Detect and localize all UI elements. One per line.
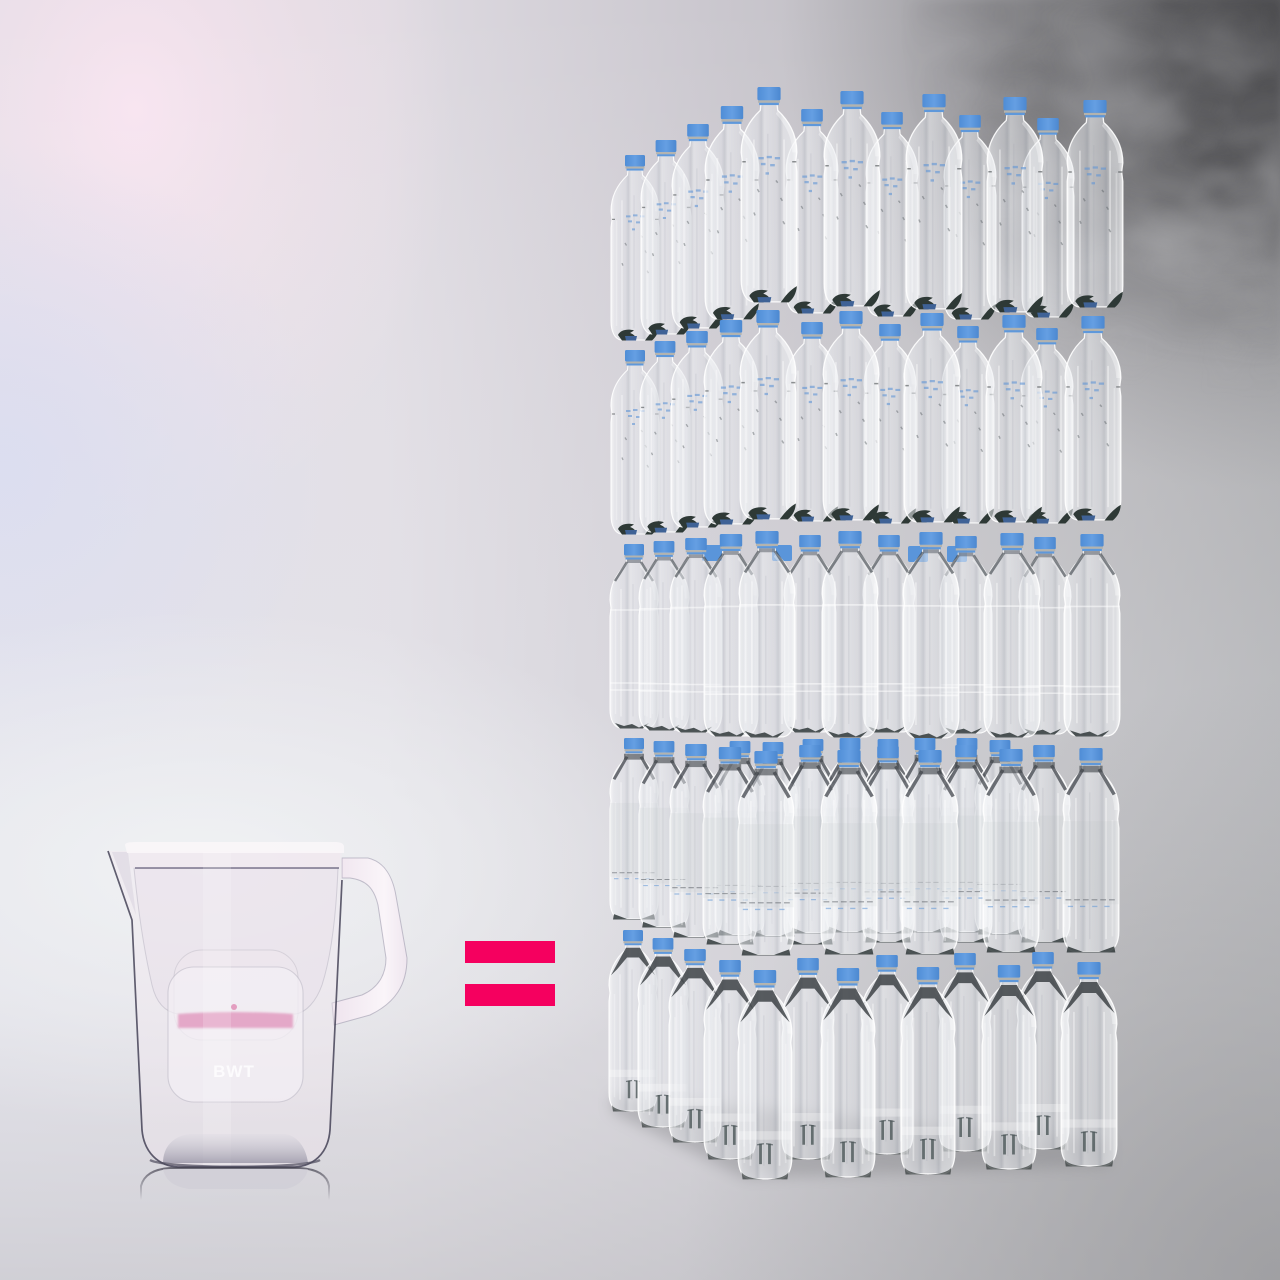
bottle row 1 (top) [611,87,1123,340]
inner water reservoir [134,868,338,1014]
spout inner line [112,852,136,915]
peeking caps behind row 3 [702,545,967,562]
light streak [203,852,231,1166]
bottle row 5 (bottom) [609,930,1117,1179]
bottle stack [609,87,1123,1179]
jug reflection [141,1168,329,1200]
bottle row 2 [611,310,1121,534]
jug lid [125,842,344,853]
reflected base [163,1169,308,1189]
jug handle [332,858,407,1025]
filter cartridge front [168,967,303,1102]
pink band of filter [178,1012,293,1028]
pink dot [231,1004,237,1010]
jug outer body [108,851,342,1167]
filter jug [108,842,407,1200]
filter logo: BWT [213,1062,255,1081]
jug base [163,1134,308,1163]
equals sign [465,941,555,1006]
jug rim [130,852,340,868]
jug wall shading lines [108,851,342,1167]
filter cartridge back [174,950,298,1040]
floor shadow under bottles [612,1095,1110,1178]
bottle row 3 [610,531,1120,738]
smoke cloud, top right [0,0,1280,560]
bottle row 4 [610,738,1119,955]
